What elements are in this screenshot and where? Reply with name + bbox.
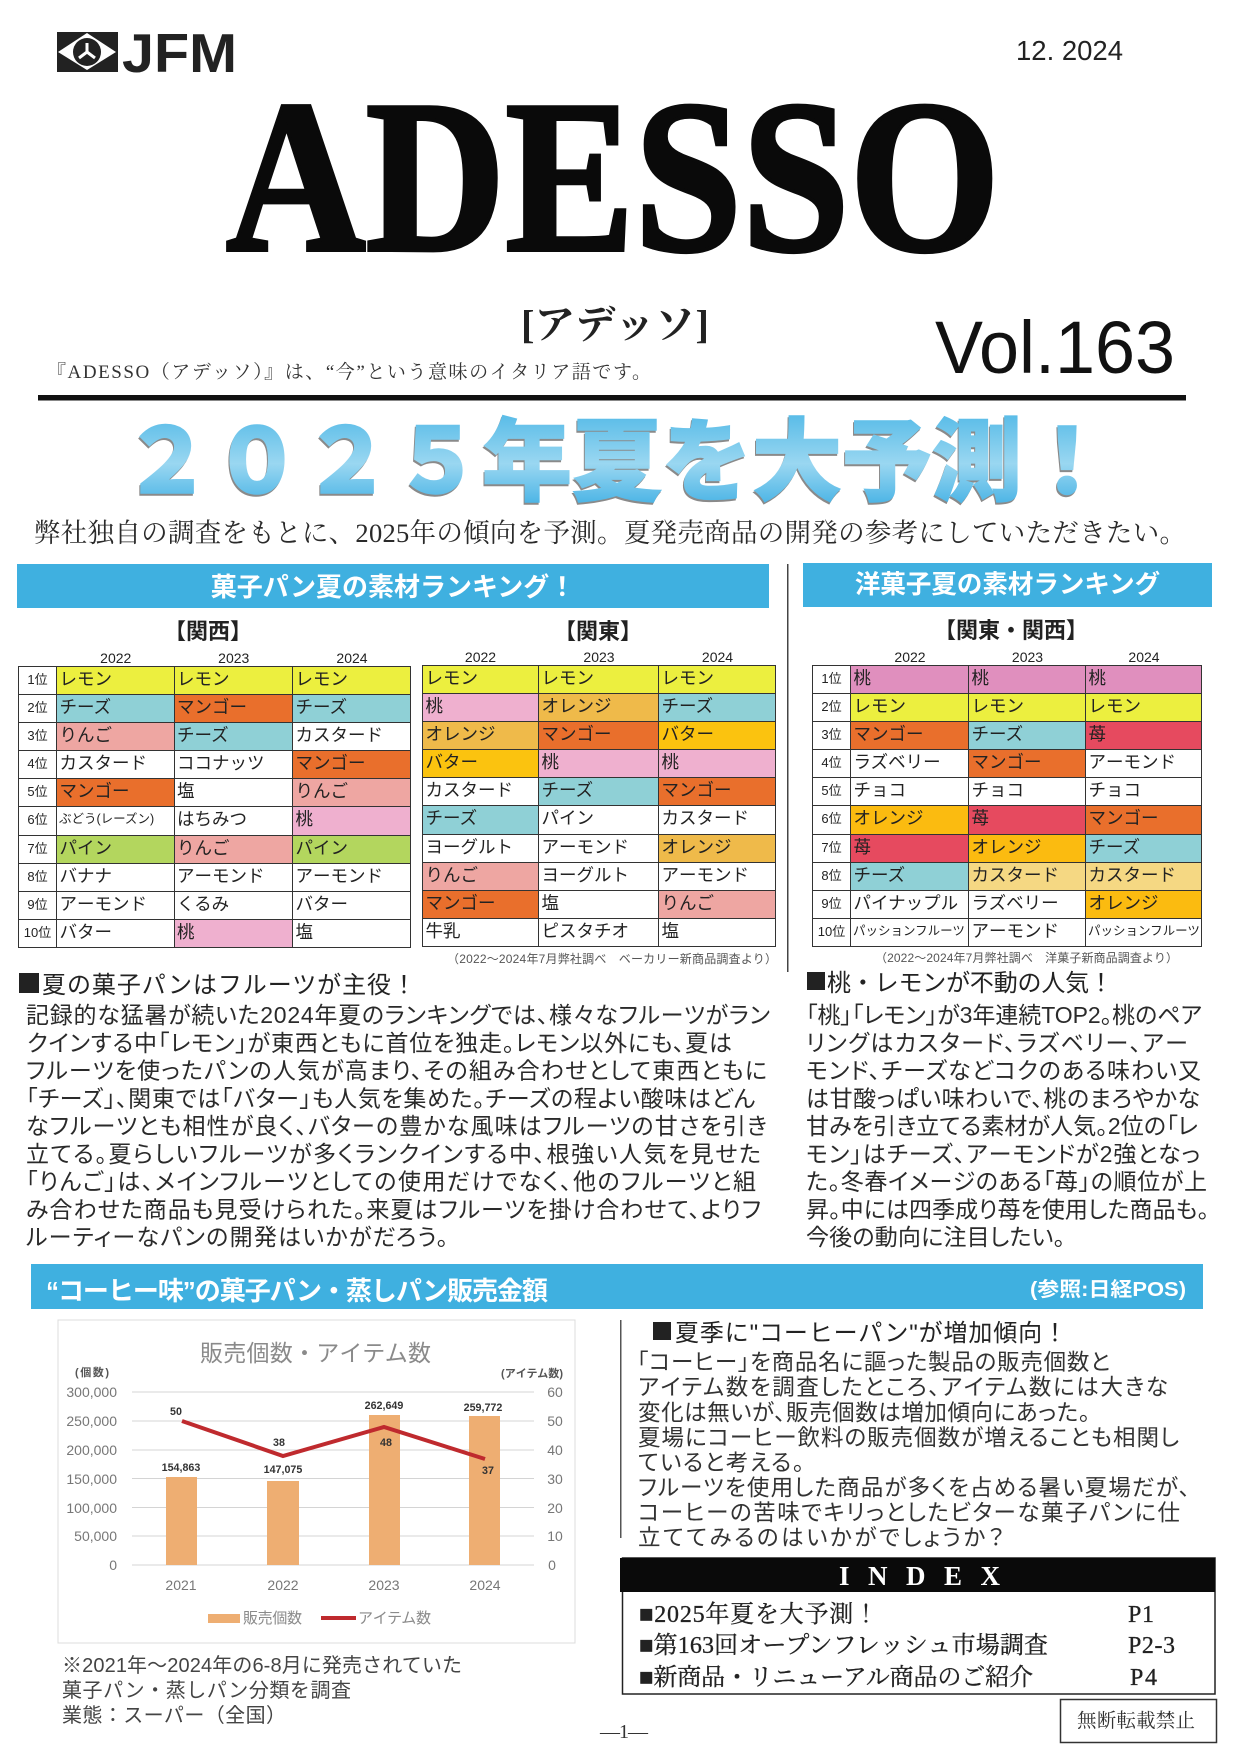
data labels: 259,772 [464,1402,502,1414]
article body: bread: 記録的な猛暑が続いた2024年夏のランキングでは、様々なフルーツがラン [26,1002,770,1028]
index entries [639,1601,1175,1691]
panel: western sweets ranking [803,563,1212,965]
data labels: 147,075 [264,1464,302,1476]
article heading: western sweets: 桃・レモンが不動の人気！ [827,970,1113,997]
table: Kansai ranking: りんご [296,781,348,801]
subheading: Kansai: 【関西】 [164,619,252,644]
index entries: P1 [1128,1602,1154,1628]
x axis years: 2021 [165,1577,197,1593]
right axis: 20 [547,1500,563,1516]
band: western sweets ranking heading [803,563,1212,607]
data labels: 48 [380,1437,392,1449]
table: western sweets ranking: 2位 [821,699,842,714]
table: Kanto ranking: カスタード [426,780,513,800]
subtitle: katakana reading: [アデッソ] [521,302,709,347]
article body: coffee bread [637,1350,1190,1550]
table: western sweets ranking: チョコ [972,780,1024,800]
table: western sweets ranking: パッションフルーツ [853,924,965,938]
table: western sweets ranking: マンゴー [1088,808,1158,828]
table: western sweets ranking: 8位 [821,868,842,883]
table: Kanto ranking: パイン [542,808,594,828]
table: Kanto ranking: 桃 [662,752,679,772]
line: item count [182,1421,485,1459]
index entries: ■2025年夏を大予測！ [639,1601,878,1628]
table: Kanto ranking: オレンジ [662,837,732,857]
left axis unit: (個数) [75,1365,109,1379]
right axis: 10 [547,1528,563,1544]
table: western sweets ranking: ラズベリー [972,893,1059,913]
table: Kanto ranking: アーモンド [662,865,749,885]
table: Kansai ranking: 塩 [177,781,194,801]
data labels: 37 [482,1465,494,1477]
article heading: coffee bread: 夏季に"コーヒーパン"が増加傾向！ [675,1320,1067,1347]
article body: bread: 「チーズ」、関東では「バター」も人気を集めた。チーズの程よい酸味はどん [26,1085,755,1111]
table: western sweets ranking: 桃 [972,668,989,688]
band title: “コーヒー味”の菓子パン・蒸しパン販売金額 [46,1276,548,1306]
caption: western sweets ranking source: （2022〜2024年7月弊社調べ 洋菓子新商品調査より） [875,950,1178,965]
headline: 2025 summer forecast: ２０２５年夏を大予測！ [122,413,1112,513]
table: Kanto ranking: カスタード [662,808,749,828]
lead sentence: 弊社独自の調査をもとに、2025年の傾向を予測。夏発売商品の開発の参考にしていただきたい。 [34,518,1186,548]
chart: sales units and item count [58,1320,575,1643]
table: western sweets ranking [812,650,1202,947]
table: western sweets ranking: 4位 [821,755,842,770]
date: 12. 2024 [1016,35,1123,66]
table: Kansai ranking: レモン [177,669,230,689]
table: western sweets ranking: 6位 [821,811,842,826]
table: Kansai ranking: チーズ [177,725,229,745]
table: western sweets ranking: マンゴー [854,724,924,744]
table: western sweets ranking: 10位 [818,924,845,939]
table: western sweets ranking: カスタード [972,865,1059,885]
table: western sweets ranking: カスタード [1088,865,1176,885]
table: western sweets ranking: レモン [854,696,906,716]
table: Kansai ranking: パイン [60,838,112,858]
table: western sweets ranking: レモン [972,696,1024,716]
x axis years: 2023 [368,1577,400,1593]
article body: coffee bread: フルーツを使用した商品が多くを占める暑い夏場だが、 [638,1476,1190,1500]
table: western sweets ranking: 苺 [972,808,989,828]
table: western sweets ranking: チーズ [854,865,905,885]
chart title: 販売個数・アイテム数 [200,1340,431,1366]
index entries: P2-3 [1128,1633,1175,1659]
table: Kanto ranking: チーズ [426,808,477,828]
panel: bread ranking [17,564,777,966]
index header: INDEX [839,1561,1000,1591]
article body: western sweets [806,1002,1209,1250]
article body: bread: 「りんご」は、メインフルーツとしての使用だけでなく、他のフルーツと組 [26,1168,756,1194]
band: bread ranking heading: 菓子パン夏の素材ランキング！ [211,572,575,602]
article body: bread [26,1002,770,1250]
table: Kanto ranking: チーズ [542,780,593,800]
legend [208,1610,431,1627]
table: Kanto ranking: りんご [426,865,478,885]
article body: western sweets: 今後の動向に注目したい。 [806,1224,1065,1250]
table: Kanto ranking: オレンジ [542,696,612,716]
table: Kansai ranking: レモン [60,669,112,689]
intro line: 『ADESSO（アデッソ）』は、“今”という意味のイタリア語です。 [47,361,651,383]
table: Kansai ranking: マンゴー [60,781,130,801]
table: Kansai ranking: はちみつ [177,809,247,829]
right axis: 40 [547,1442,563,1458]
table: Kansai ranking: アーモンド [60,894,147,914]
left axis: 0 [109,1557,117,1573]
table: western sweets ranking: パイナップル [854,893,958,913]
article: bread [19,972,770,1250]
table: western sweets ranking: 7位 [821,840,842,855]
data labels: 38 [273,1437,285,1449]
article body: western sweets: 昇。中には四季成り苺を使用した商品も。 [806,1196,1209,1222]
table: Kanto ranking: マンゴー [542,724,612,744]
right axis [547,1384,563,1573]
left axis: 250,000 [66,1413,117,1429]
article body: coffee bread: 夏場にコーヒー飲料の販売個数が増えることも相関し [638,1426,1179,1450]
table: Kanto ranking: 牛乳 [426,921,460,941]
table: Kanto ranking: 桃 [542,752,559,772]
table: Kansai ranking: 10位 [24,925,51,940]
table: Kansai ranking [18,651,411,948]
table: Kansai ranking: 7位 [27,841,48,856]
table: Kanto ranking: マンゴー [426,893,496,913]
article body: coffee bread: 変化は無いが、販売個数は増加傾向にあった。 [638,1400,1090,1426]
right axis unit: (アイテム数) [501,1366,563,1380]
index entries: ■新商品・リニューアル商品のご紹介 [639,1664,1033,1691]
table: Kansai ranking: 1位 [27,672,48,687]
table: Kanto ranking: 塩 [662,921,679,941]
table: western sweets ranking: チョコ [1088,780,1141,800]
logo: JFM [57,22,237,84]
band: bread ranking heading [17,564,769,608]
table: western sweets ranking: 5位 [821,783,842,798]
table: Kansai ranking: くるみ [177,894,229,914]
band: western sweets ranking heading: 洋菓子夏の素材ランキング [855,571,1160,599]
article body: western sweets: 「桃」「レモン」が3年連続TOP2。桃のペア [806,1002,1202,1028]
table: Kansai ranking: 9位 [27,897,48,912]
index box [620,1558,1215,1694]
table: Kanto ranking: バター [426,752,478,772]
table: western sweets ranking: 桃 [1088,668,1106,688]
table: Kanto ranking [422,650,776,947]
table: Kansai ranking: アーモンド [177,866,264,886]
legend: 販売個数 [243,1610,302,1627]
table: Kansai ranking: 桃 [177,922,194,942]
table: Kansai ranking: 桃 [296,809,313,829]
article body: western sweets: た。冬春イメージのある「苺」の順位が上 [806,1168,1207,1194]
table: western sweets ranking: パッションフルーツ [1088,924,1200,938]
table: Kansai ranking: チーズ [60,697,111,717]
table: Kanto ranking: バター [662,724,714,744]
right axis: 50 [547,1413,563,1429]
table: Kansai ranking: バター [60,922,112,942]
table: Kansai ranking: チーズ [296,697,347,717]
table: Kansai ranking: マンゴー [177,697,247,717]
table: Kanto ranking: ヨーグルト [542,865,629,885]
index entries: ■第163回オープンフレッシュ市場調査 [639,1632,1048,1659]
table: western sweets ranking: チョコ [854,780,906,800]
table: Kansai ranking: パイン [296,838,348,858]
article body: western sweets: モン」はチーズ、アーモンドが2強となっ [806,1141,1200,1167]
article heading: bread: 夏の菓子パンはフルーツが主役！ [42,972,416,999]
table: western sweets ranking: レモン [1088,696,1141,716]
table: western sweets ranking: オレンジ [1088,893,1158,913]
left axis: 50,000 [74,1528,117,1544]
table: Kansai ranking: 6位 [27,812,48,827]
index header [620,1558,1215,1592]
chart note: ※2021年〜2024年の6-8月に発売されていた [62,1654,462,1677]
x axis years: 2024 [469,1577,501,1593]
table: Kansai ranking: カスタード [296,725,383,745]
icon: JFM emblem [57,32,118,72]
table: Kanto ranking: ヨーグルト [426,837,513,857]
table: western sweets ranking: アーモンド [1088,752,1176,772]
table: Kansai ranking: バナナ [60,866,112,886]
table: Kansai ranking: ぶどう(レーズン) [59,812,154,826]
table: Kansai ranking: アーモンド [296,866,383,886]
table: western sweets ranking: マンゴー [972,752,1042,772]
copyright notice: 無断転載禁止 [1077,1710,1195,1732]
copyright notice [1060,1700,1216,1742]
left axis: 150,000 [66,1471,117,1487]
x axis years [165,1577,501,1593]
table: western sweets ranking: 3位 [821,727,842,742]
section band: coffee flavour [31,1264,1203,1309]
band source: (参照:日経POS) [1030,1278,1186,1301]
volume number: Vol.163 [935,306,1175,389]
left axis: 100,000 [66,1500,117,1516]
article body: western sweets: リングはカスタード、ラズベリー、アー [806,1030,1188,1056]
right axis: 0 [548,1557,556,1573]
table: Kanto ranking: レモン [426,668,478,688]
table: Kanto ranking: 桃 [426,696,443,716]
chart note: 業態：スーパー（全国） [62,1704,286,1727]
article body: western sweets: は甘酸っぱい味わいで、桃のまろやかな [806,1085,1200,1111]
article body: bread: ルーティーなパンの開発はいかがだろう。 [26,1224,448,1250]
table: Kansai ranking: ココナッツ [177,753,264,773]
table: Kansai ranking: りんご [177,838,230,858]
table: Kanto ranking: りんご [662,893,714,913]
legend: アイテム数 [358,1610,431,1627]
left axis: 300,000 [66,1384,117,1400]
article body: western sweets: 甘みを引き立てる素材が人気。2位の「レ [806,1113,1198,1139]
bars: sales units [166,1415,500,1565]
article body: bread: 立てる。夏らしいフルーツが多くランクインする中、根強い人気を見せた [26,1141,761,1167]
data labels: 262,649 [365,1400,403,1412]
data labels: 50 [170,1406,182,1418]
article body: bread: フルーツを使ったパンの人気が高まり、その組み合わせとして東西ともに [26,1058,767,1084]
subheading: Kanto: 【関東】 [554,619,642,644]
article: coffee bread [637,1320,1190,1550]
table: western sweets ranking: 9位 [821,896,842,911]
article body: western sweets: モンド、チーズなどコクのある味わい又 [806,1058,1201,1084]
logo: JFM: JFM [122,22,237,84]
chart note [62,1654,462,1727]
table: Kansai ranking: 2位 [27,700,48,715]
data labels: 154,863 [162,1462,200,1474]
chart note: 菓子パン・蒸しパン分類を調査 [62,1679,351,1702]
headline: 2025 summer forecast: ２０２５年夏を大予測！ [121,415,1111,515]
right axis: 30 [547,1471,563,1487]
page number: —1— [599,1721,649,1743]
table: Kanto ranking: 塩 [542,893,559,913]
title: ADESSO: ADESSO [226,57,1000,298]
table: Kansai ranking: 塩 [296,922,313,942]
table: western sweets ranking: チーズ [1088,837,1140,857]
article body: coffee bread: 立ててみるのはいかがでしょうか？ [638,1526,1004,1550]
table: Kansai ranking: レモン [296,669,348,689]
table: Kansai ranking: 3位 [27,728,48,743]
table: western sweets ranking: アーモンド [972,921,1059,941]
table: Kansai ranking: 4位 [27,756,48,771]
table: Kansai ranking: マンゴー [296,753,366,773]
table: Kanto ranking: チーズ [662,696,713,716]
right axis: 60 [547,1384,563,1400]
article body: coffee bread: 「コーヒー」を商品名に謳った製品の販売個数と [637,1350,1110,1375]
table: Kanto ranking: オレンジ [426,724,496,744]
article body: coffee bread: ていると考える。 [638,1450,804,1476]
article body: bread: なフルーツとも相性が良く、バターの豊かな風味はフルーツの甘さを引き [26,1113,767,1139]
table: western sweets ranking: チーズ [972,724,1023,744]
table: Kansai ranking: 5位 [27,784,48,799]
table: Kansai ranking: りんご [60,725,112,745]
article body: coffee bread: コーヒーの苦味でキリっとしたビターな菓子パンに仕 [638,1500,1180,1526]
table: Kanto ranking: レモン [662,668,714,688]
caption: bread ranking source: （2022〜2024年7月弊社調べ ベーカリー新商品調査より） [447,951,777,966]
table: Kansai ranking: バター [296,894,348,914]
table: western sweets ranking: ラズベリー [854,752,941,772]
article: western sweets [806,970,1209,1250]
x axis years: 2022 [267,1577,299,1593]
table: western sweets ranking: 苺 [1088,724,1106,744]
subheading: Kanto and Kansai: 【関東・関西】 [934,618,1088,643]
data labels [162,1400,502,1477]
table: western sweets ranking: オレンジ [854,808,924,828]
article body: bread: み合わせた商品も見受けられた。来夏はフルーツを掛け合わせて、よりフ [26,1196,761,1222]
article body: bread: クインする中「レモン」が東西ともに首位を独走。レモン以外にも、夏は [27,1030,732,1056]
left axis [66,1384,117,1573]
table: Kanto ranking: マンゴー [662,780,732,800]
article body: coffee bread: アイテム数を調査したところ、アイテム数には大きな [638,1375,1168,1400]
table: Kanto ranking: アーモンド [542,837,629,857]
table: western sweets ranking: オレンジ [972,837,1042,857]
left axis: 200,000 [66,1442,117,1458]
table: western sweets ranking: 桃 [854,668,871,688]
table: Kansai ranking: 8位 [27,869,48,884]
index entries: P4 [1130,1665,1157,1691]
table: Kansai ranking: カスタード [60,753,147,773]
table: Kanto ranking: ピスタチオ [542,921,629,941]
table: Kanto ranking: レモン [542,668,594,688]
table: western sweets ranking: 苺 [854,837,871,857]
table: western sweets ranking: 1位 [821,671,842,686]
